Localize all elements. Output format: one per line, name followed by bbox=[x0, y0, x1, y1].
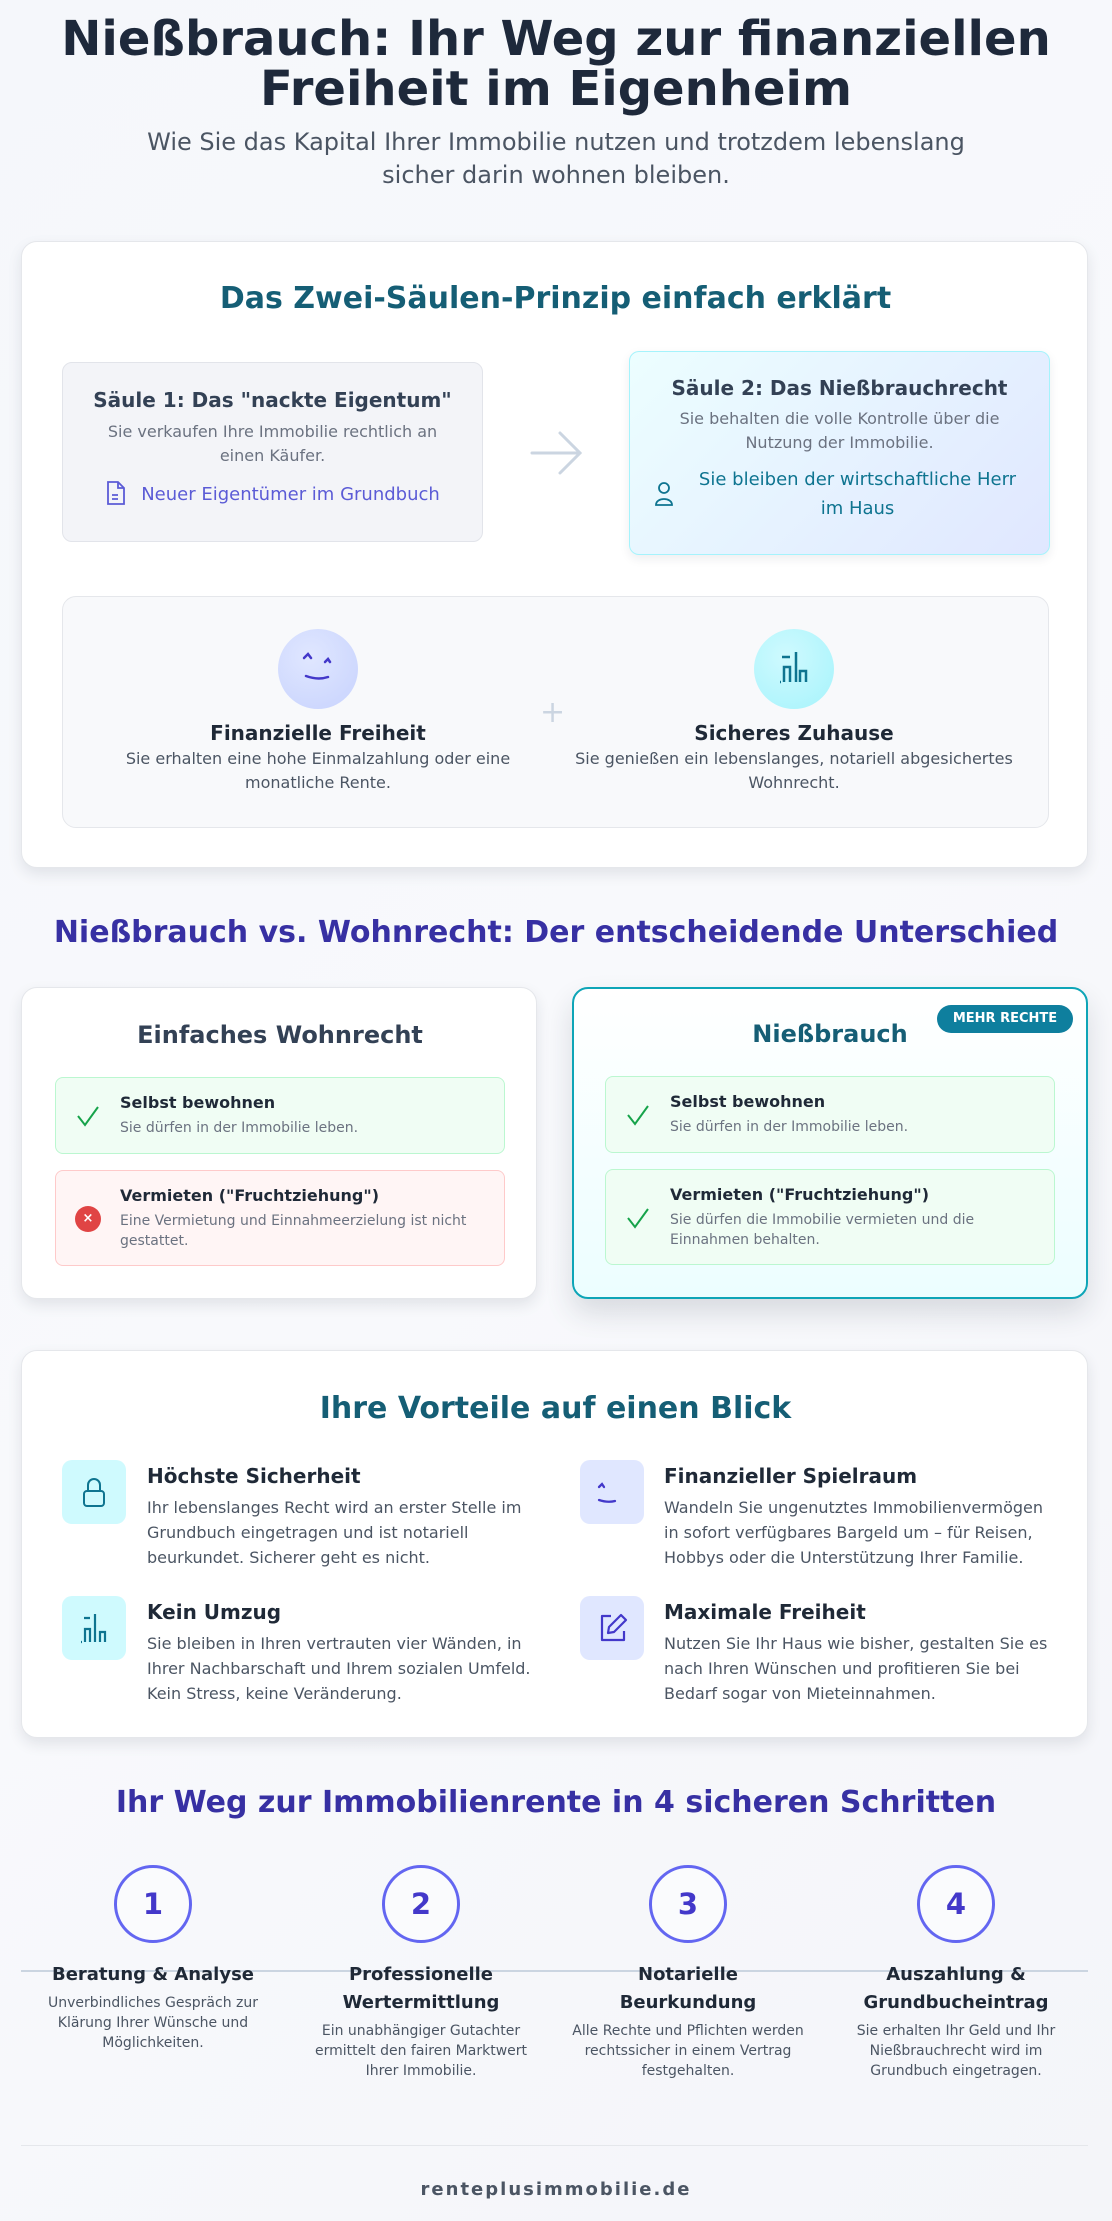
item: selbst bewohnen bbox=[55, 1077, 505, 1154]
step 3: Beurkundung bbox=[620, 1992, 756, 2013]
benefit: sicherheit: Ihr lebenslanges Recht wird an erster Stelle im Grundbuch eingetragen und ist notariell beurkundet. Sicherer geht es nicht. bbox=[147, 1498, 521, 1567]
step 2: ermittelt den fairen Marktwert bbox=[315, 2043, 527, 2059]
item: selbst bewohnen bbox=[605, 1076, 1055, 1153]
item: vermieten nicht erlaubt: Eine Vermietung und Einnahmeerzielung ist nicht gestattet. bbox=[120, 1213, 466, 1249]
text: sicheres zuhause: Sie genießen ein lebenslanges, notariell abgesichertes bbox=[575, 749, 1013, 768]
item: vermieten erlaubt: Vermieten ("Fruchtziehung") bbox=[670, 1185, 929, 1204]
step 4 bbox=[857, 1865, 1056, 2079]
step 1 bbox=[48, 1865, 258, 2051]
panel: zwei-saeulen-prinzip bbox=[21, 241, 1088, 868]
item: selbst bewohnen: Sie dürfen in der Immobilie leben. bbox=[670, 1119, 908, 1135]
footer: renteplusimmobilie.de bbox=[421, 2179, 691, 2200]
step 3: Alle Rechte und Pflichten werden bbox=[572, 2023, 804, 2039]
pillar 1: Sie verkaufen Ihre Immobilie rechtlich an bbox=[108, 422, 437, 441]
title: Freiheit im Eigenheim bbox=[260, 61, 852, 117]
benefit: kein umzug bbox=[62, 1596, 531, 1703]
subtitle bbox=[147, 128, 965, 189]
panel: einfaches wohnrecht: Einfaches Wohnrecht bbox=[137, 1021, 423, 1049]
item: vermieten nicht erlaubt: Vermieten ("Fruchtziehung") bbox=[120, 1186, 379, 1205]
step 4: 4 bbox=[946, 1887, 966, 1921]
pillar 1: einen Käufer. bbox=[220, 446, 325, 465]
step 4: Grundbuch eingetragen. bbox=[870, 2063, 1042, 2079]
pillar 1 bbox=[62, 362, 483, 542]
step 4: Grundbucheintrag bbox=[863, 1992, 1049, 2013]
pillar 2: Säule 2: Das Nießbrauchrecht bbox=[672, 376, 1008, 400]
panel: einfaches wohnrecht bbox=[21, 987, 537, 1299]
step 1: Möglichkeiten. bbox=[102, 2035, 204, 2051]
text: sicheres zuhause bbox=[575, 721, 1013, 792]
icon: money bbox=[278, 629, 358, 709]
benefit: spielraum bbox=[580, 1460, 1043, 1567]
benefit: sicherheit: Höchste Sicherheit bbox=[147, 1464, 361, 1488]
timeline line bbox=[21, 1970, 1088, 1972]
highlight: new owner: Neuer Eigentümer im Grundbuch bbox=[141, 484, 440, 505]
panel: vorteile bbox=[21, 1350, 1088, 1738]
step 2: Ein unabhängiger Gutachter bbox=[322, 2023, 520, 2039]
heading: vergleich: Nießbrauch vs. Wohnrecht: Der entscheidende Unterschied bbox=[54, 915, 1058, 950]
benefit: spielraum: Wandeln Sie ungenutztes Immobilienvermögen in sofort verfügbares Bargeld um – für Reisen, Hobbys oder die Unterstützung Ihrer Familie. bbox=[664, 1498, 1043, 1567]
text: finanzielle freiheit bbox=[126, 721, 510, 792]
text: sicheres zuhause: Sicheres Zuhause bbox=[694, 721, 894, 745]
step 3: festgehalten. bbox=[642, 2063, 734, 2079]
panel: vorteile: Ihre Vorteile auf einen Blick bbox=[320, 1391, 791, 1426]
step 3 bbox=[572, 1865, 804, 2079]
text: sicheres zuhause: Wohnrecht. bbox=[748, 773, 840, 792]
item: vermieten nicht erlaubt: × bbox=[83, 1211, 93, 1226]
item: vermieten nicht erlaubt bbox=[55, 1170, 505, 1266]
item: selbst bewohnen: Sie dürfen in der Immobilie leben. bbox=[120, 1120, 358, 1136]
item: selbst bewohnen: Selbst bewohnen bbox=[120, 1093, 275, 1112]
title bbox=[61, 11, 1051, 117]
item: selbst bewohnen: Selbst bewohnen bbox=[670, 1092, 825, 1111]
step 3: Notarielle bbox=[638, 1964, 738, 1985]
step 1: Unverbindliches Gespräch zur bbox=[48, 1995, 258, 2011]
highlight: economic owner: im Haus bbox=[821, 498, 894, 519]
panel: niessbrauch: Nießbrauch bbox=[752, 1020, 908, 1048]
step 4: Auszahlung & bbox=[886, 1964, 1026, 1985]
pillar 2: Nutzung der Immobilie. bbox=[745, 433, 934, 452]
step 4: Sie erhalten Ihr Geld und Ihr bbox=[857, 2023, 1055, 2039]
text: finanzielle freiheit: Finanzielle Freiheit bbox=[210, 721, 426, 745]
step 1: 1 bbox=[143, 1887, 163, 1921]
item: vermieten erlaubt bbox=[605, 1169, 1055, 1265]
plus: + bbox=[540, 695, 565, 730]
benefit: sicherheit bbox=[62, 1460, 521, 1567]
benefit: maximale freiheit: Maximale Freiheit bbox=[664, 1600, 866, 1624]
benefit: maximale freiheit: Nutzen Sie Ihr Haus wie bisher, gestalten Sie es nach Ihren Wünschen und profitieren Sie bei Bedarf sogar von Mieteinnahmen. bbox=[664, 1634, 1047, 1703]
benefit: spielraum: Finanzieller Spielraum bbox=[664, 1464, 917, 1488]
item: vermieten erlaubt: Sie dürfen die Immobilie vermieten und die Einnahmen behalten. bbox=[670, 1212, 974, 1248]
step 4: Nießbrauchrecht wird im bbox=[870, 2043, 1042, 2059]
highlight: economic owner: Sie bleiben der wirtschaftliche Herr bbox=[699, 469, 1016, 490]
benefit: kein umzug: Sie bleiben in Ihren vertrauten vier Wänden, in Ihrer Nachbarschaft und Ihrem sozialen Umfeld. Kein Stress, keine Veränderung. bbox=[147, 1634, 531, 1703]
step 3: rechtssicher in einem Vertrag bbox=[585, 2043, 791, 2059]
text: finanzielle freiheit: monatliche Rente. bbox=[245, 773, 391, 792]
text: finanzielle freiheit: Sie erhalten eine hohe Einmalzahlung oder eine bbox=[126, 749, 510, 768]
highlight: economic owner bbox=[655, 469, 1016, 519]
subtitle: Wie Sie das Kapital Ihrer Immobilie nutzen und trotzdem lebenslang bbox=[147, 128, 965, 156]
pillar 2 bbox=[629, 351, 1050, 555]
subtitle: sicher darin wohnen bleiben. bbox=[382, 161, 730, 189]
pillar 1: Säule 1: Das "nackte Eigentum" bbox=[93, 388, 452, 412]
title: Nießbrauch: Ihr Weg zur finanziellen bbox=[61, 11, 1051, 67]
badge: MEHR RECHTE bbox=[953, 1011, 1057, 1026]
benefit: kein umzug: Kein Umzug bbox=[147, 1600, 281, 1624]
result box bbox=[62, 596, 1049, 828]
step 2: Ihrer Immobilie. bbox=[366, 2063, 476, 2079]
arrow bbox=[530, 432, 582, 474]
panel: niessbrauch bbox=[572, 987, 1088, 1299]
step 2: Professionelle bbox=[349, 1964, 493, 1985]
pillar 2: Sie behalten die volle Kontrolle über die bbox=[680, 409, 999, 428]
heading: schritte: Ihr Weg zur Immobilienrente in 4 sicheren Schritten bbox=[116, 1785, 996, 1820]
step 2 bbox=[315, 1865, 527, 2079]
step 1: Klärung Ihrer Wünsche und bbox=[58, 2015, 248, 2031]
step 1: Beratung & Analyse bbox=[52, 1964, 254, 1985]
heading: Das Zwei-Säulen-Prinzip einfach erklärt bbox=[220, 281, 891, 316]
badge bbox=[937, 1005, 1073, 1033]
icon: home bbox=[754, 629, 834, 709]
step 2: 2 bbox=[411, 1887, 431, 1921]
benefit: maximale freiheit bbox=[580, 1596, 1047, 1703]
step 2: Wertermittlung bbox=[343, 1992, 499, 2013]
step 3: 3 bbox=[678, 1887, 698, 1921]
